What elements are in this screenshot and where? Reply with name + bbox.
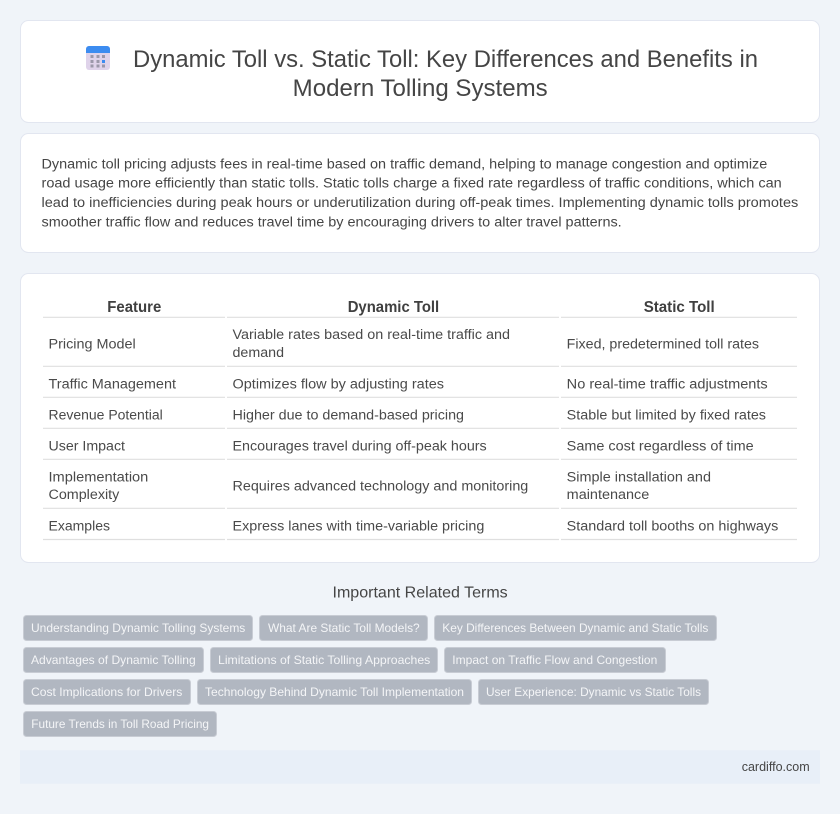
tag: future trends: Future Trends in Toll Road Pricing xyxy=(31,717,209,731)
tag: what are static toll models: What Are Static Toll Models? xyxy=(268,621,420,635)
title: Modern Tolling Systems xyxy=(293,75,548,102)
tag: technology behind implementation: Technology Behind Dynamic Toll Implementation xyxy=(205,685,464,699)
tag: limitations of static tolling xyxy=(210,648,438,672)
row: user impact xyxy=(48,438,754,454)
tag: understanding dynamic tolling systems: Understanding Dynamic Tolling Systems xyxy=(31,621,245,635)
text block: introduction paragraph xyxy=(42,156,798,230)
tag: advantages of dynamic tolling xyxy=(24,648,204,672)
table header: Static Toll xyxy=(644,299,715,316)
row: revenue potential xyxy=(48,407,766,423)
footer: cardiffo.com xyxy=(742,760,810,774)
panel: comparison table xyxy=(20,274,820,562)
tag: future trends xyxy=(24,712,216,736)
tag: cost implications: Cost Implications for Drivers xyxy=(31,685,182,699)
row: traffic management: No real-time traffic adjustments xyxy=(567,376,768,392)
footer xyxy=(20,750,820,784)
tag: what are static toll models xyxy=(260,616,428,640)
title: Dynamic Toll vs. Static Toll: Key Differences and Benefits in xyxy=(133,46,758,73)
row: examples: Examples xyxy=(48,518,110,534)
row: traffic management: Traffic Management xyxy=(48,376,176,392)
text block: introduction paragraph: smoother traffic flow and reduces travel time by encouraging drivers to alter travel patterns. xyxy=(42,214,622,230)
title xyxy=(133,46,758,102)
tag: user experience: User Experience: Dynamic vs Static Tolls xyxy=(486,685,701,699)
row: pricing model: Pricing Model xyxy=(48,336,136,352)
table header: Feature xyxy=(107,299,161,316)
tag: impact on traffic flow xyxy=(444,648,666,672)
table header: Dynamic Toll xyxy=(348,299,439,316)
row: user impact: Same cost regardless of time xyxy=(567,438,754,454)
text block: introduction paragraph: lead to inefficiencies during peak hours or underutilization during off-peak times. Implementing dynamic tolls promotes xyxy=(42,195,798,211)
text block: introduction paragraph: Dynamic toll pricing adjusts fees in real-time based on traffic demand, helping to manage congestion and optimize xyxy=(42,156,767,172)
row: user impact: Encourages travel during off-peak hours xyxy=(232,438,487,454)
row: implementation complexity: Complexity xyxy=(48,487,120,503)
row: implementation complexity: Requires advanced technology and monitoring xyxy=(232,478,528,494)
row: implementation complexity: maintenance xyxy=(567,487,649,503)
tag: user experience xyxy=(478,680,708,704)
heading: important related terms: Important Related Terms xyxy=(332,585,508,602)
panel: introduction xyxy=(20,134,820,252)
row: revenue potential: Higher due to demand-based pricing xyxy=(232,407,464,423)
table header xyxy=(107,299,715,316)
tag: advantages of dynamic tolling: Advantages of Dynamic Tolling xyxy=(31,653,196,667)
row: implementation complexity: Implementation xyxy=(48,469,148,485)
tag: key differences: Key Differences Between Dynamic and Static Tolls xyxy=(442,621,708,635)
row: implementation complexity: Simple installation and xyxy=(567,469,711,485)
row: examples: Express lanes with time-variable pricing xyxy=(232,518,484,534)
row: examples xyxy=(48,518,778,534)
icon: calendar xyxy=(86,46,110,70)
tag: technology behind implementation xyxy=(198,680,472,704)
row: revenue potential: Stable but limited by fixed rates xyxy=(567,407,766,423)
row: pricing model: Fixed, predetermined toll rates xyxy=(567,336,759,352)
tag: key differences xyxy=(434,616,716,640)
row: pricing model xyxy=(48,327,759,361)
row: implementation complexity xyxy=(48,469,711,503)
tag: cost implications xyxy=(24,680,190,704)
text block: introduction paragraph: road usage more efficiently than static tolls. Static tolls charge a fixed rate regardless of traffic conditions, which can xyxy=(42,176,782,192)
tag: impact on traffic flow: Impact on Traffic Flow and Congestion xyxy=(452,653,657,667)
row: pricing model: demand xyxy=(232,345,284,361)
tag: understanding dynamic tolling systems xyxy=(24,616,252,640)
panel: title card xyxy=(20,20,820,122)
row: user impact: User Impact xyxy=(48,438,125,454)
row: traffic management: Optimizes flow by adjusting rates xyxy=(232,376,444,392)
row: pricing model: Variable rates based on real-time traffic and xyxy=(232,327,510,343)
row: traffic management xyxy=(48,376,768,392)
tag group: related terms xyxy=(24,616,716,736)
tag: limitations of static tolling: Limitations of Static Tolling Approaches xyxy=(218,653,430,667)
row: revenue potential: Revenue Potential xyxy=(48,407,163,423)
row: examples: Standard toll booths on highways xyxy=(567,518,778,534)
